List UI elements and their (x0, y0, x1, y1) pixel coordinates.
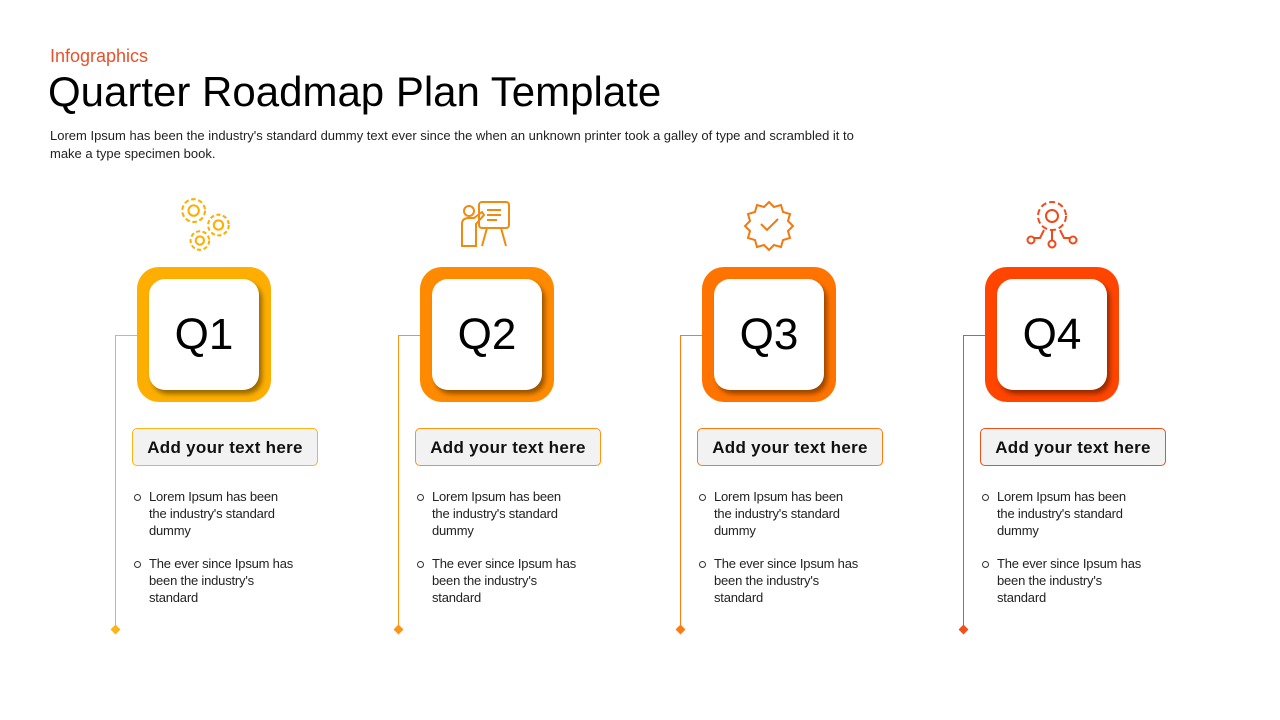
bullets: Lorem Ipsum has been the industry's standard dummy (432, 489, 561, 538)
panel: Q1: The ever since Ipsum has been the industry's standard (149, 556, 293, 605)
bullets: Lorem Ipsum has been the industry's standard dummy (714, 489, 843, 538)
description (50, 128, 854, 160)
subtitle: Infographics (50, 46, 148, 66)
Q4 box (985, 267, 1119, 402)
icon: presenter (461, 201, 510, 247)
panel: Q1 (110, 198, 318, 634)
Q4 box: Q4 (1023, 310, 1081, 359)
panel: Q3 (676, 200, 883, 634)
label (415, 428, 601, 466)
label (980, 428, 1166, 466)
label (132, 428, 318, 466)
label (697, 428, 883, 466)
panel: Q4 (958, 201, 1166, 634)
label: Add your text here (147, 438, 303, 457)
Q2 box: Q2 (458, 310, 516, 359)
panel: Q2 (394, 201, 601, 634)
panel: Q4: The ever since Ipsum has been the industry's standard (997, 556, 1141, 605)
icon: gears (181, 198, 230, 251)
label: Add your text here (712, 438, 868, 457)
bullets: Lorem Ipsum has been the industry's standard dummy (997, 489, 1126, 538)
Q3 box (702, 267, 836, 402)
panel: Q3: The ever since Ipsum has been the industry's standard (714, 556, 858, 605)
Q3 box: Q3 (740, 310, 798, 359)
panel: Q2: The ever since Ipsum has been the industry's standard (432, 556, 576, 605)
title: Quarter Roadmap Plan Template (48, 68, 661, 115)
label: Add your text here (430, 438, 586, 457)
Q1 box: Q1 (175, 310, 233, 359)
icon: gear network (1026, 201, 1078, 248)
description: Lorem Ipsum has been the industry's standard dummy text ever since the when an unknown printer took a galley of type and scrambled it to (50, 128, 854, 143)
description: make a type specimen book. (50, 146, 215, 160)
Q2 box (420, 267, 554, 402)
label: Add your text here (995, 438, 1151, 457)
Q1 box (137, 267, 271, 402)
bullets: Lorem Ipsum has been the industry's standard dummy (149, 489, 278, 538)
icon: badge check (744, 200, 794, 252)
